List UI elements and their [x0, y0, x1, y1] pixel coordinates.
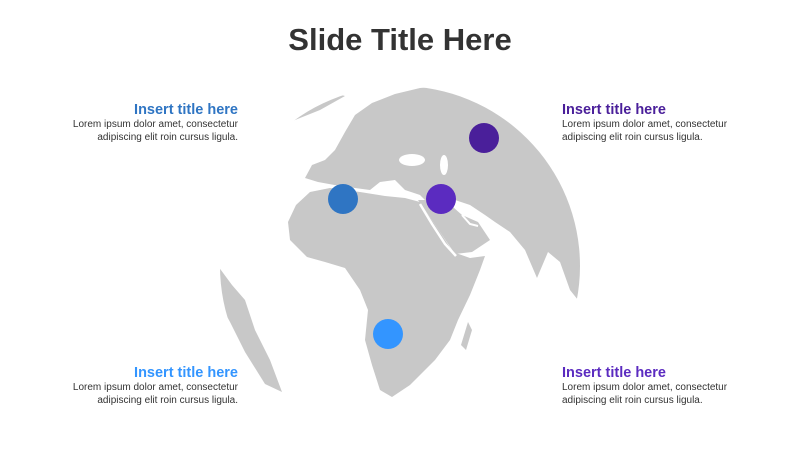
text block: bottom right: adipiscing elit roin cursus ligula.	[562, 395, 703, 406]
text block: top left: adipiscing elit roin cursus ligula.	[97, 132, 238, 143]
seas	[399, 154, 425, 166]
text block: top left	[73, 102, 238, 143]
text block: bottom left: Lorem ipsum dolor amet, consectetur	[73, 382, 238, 393]
title: Slide Title Here	[288, 22, 512, 57]
continent: africa	[288, 188, 485, 397]
marker 4	[373, 319, 403, 349]
marker 3	[469, 123, 499, 153]
continent: eurasia	[305, 84, 590, 300]
marker 1	[328, 184, 358, 214]
continent: arabia	[418, 200, 490, 254]
text block: bottom right	[562, 365, 727, 406]
continent: greenland	[295, 96, 345, 120]
text block: bottom left: adipiscing elit roin cursus ligula.	[97, 395, 238, 406]
globe map	[220, 88, 580, 397]
text block: bottom left: Insert title here	[134, 365, 238, 381]
text block: top right: adipiscing elit roin cursus ligula.	[562, 132, 703, 143]
continent: americas	[220, 269, 282, 392]
madagascar	[461, 322, 472, 350]
text block: top right: Insert title here	[562, 102, 666, 118]
text block: bottom right: Insert title here	[562, 365, 666, 381]
text block: bottom left	[73, 365, 238, 406]
text block: top left: Insert title here	[134, 102, 238, 118]
marker 2	[426, 184, 456, 214]
text block: top left: Lorem ipsum dolor amet, consectetur	[73, 119, 238, 130]
text block: top right	[562, 102, 727, 143]
text block: top right: Lorem ipsum dolor amet, consectetur	[562, 119, 727, 130]
text block: bottom right: Lorem ipsum dolor amet, consectetur	[562, 382, 727, 393]
